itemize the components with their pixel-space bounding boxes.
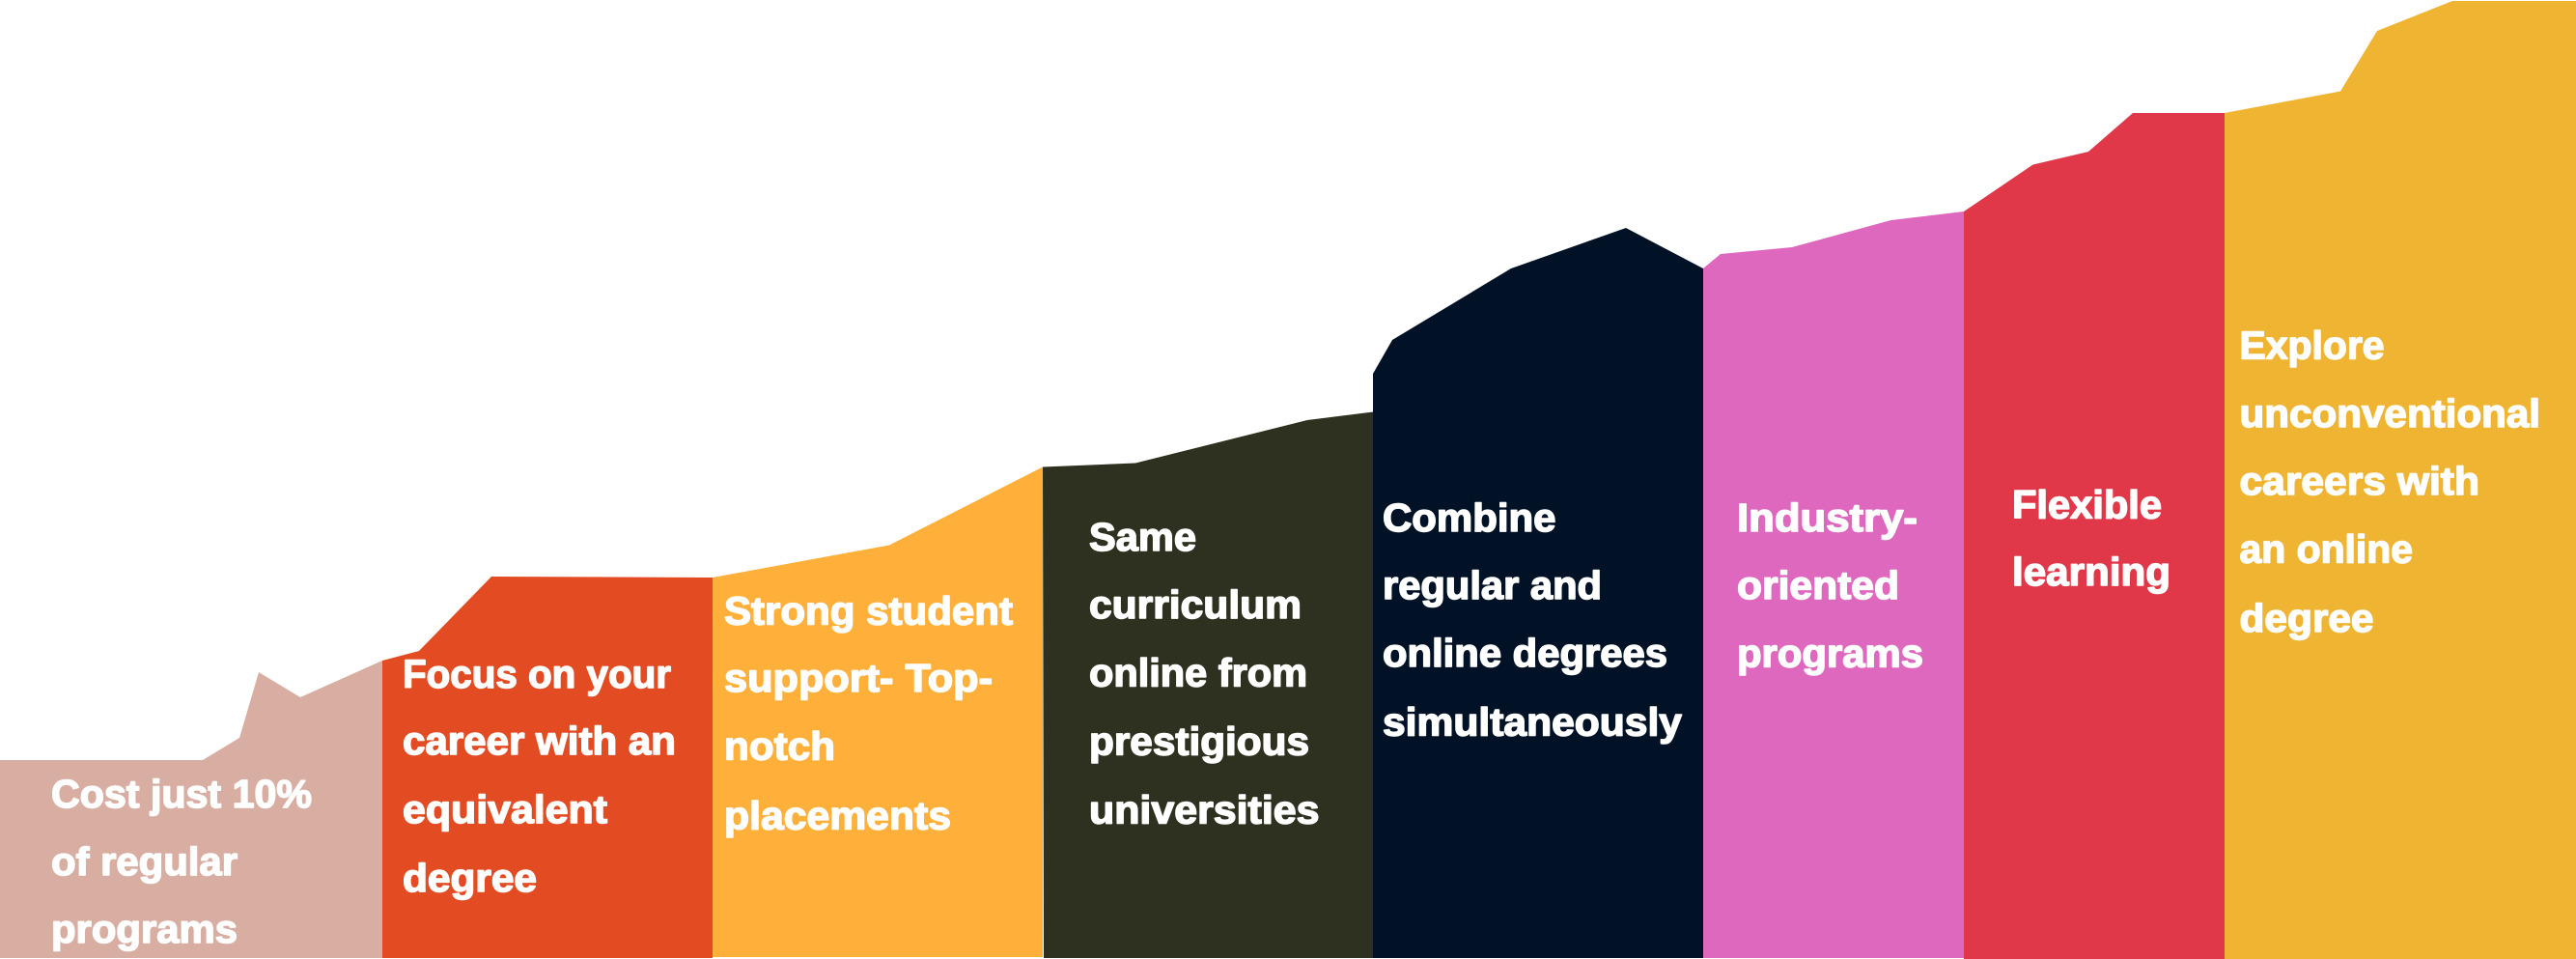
text: focus on your career: Focus on your [403,652,671,696]
text: focus on your career: degree [403,856,537,900]
text: strong student support: notch [724,724,835,769]
text: explore unconventional careers: an online [2240,527,2413,572]
text: same curriculum: curriculum [1089,582,1302,627]
text: cost just 10% [51,772,312,951]
text: flexible learning: Flexible [2012,483,2162,527]
text: explore unconventional careers: careers with [2240,459,2479,503]
text: combine regular and online: regular and [1383,563,1602,607]
text: industry-oriented programs [1737,495,1923,676]
text: same curriculum: online from [1089,651,1307,695]
panel: industry-oriented [1703,212,1964,958]
text: explore unconventional careers: Explore [2240,323,2385,367]
text: combine regular and online: online degrees [1383,631,1667,675]
text: flexible learning [2012,483,2170,594]
text: focus on your career: career with an [403,719,676,763]
text: cost just 10%: programs [51,907,238,951]
panel: focus on career [382,577,713,958]
text: combine regular and online: Combine [1383,495,1556,540]
text: combine regular and online [1383,495,1682,744]
text: explore unconventional careers [2240,323,2540,640]
text: explore unconventional careers: unconventional [2240,391,2540,436]
panel: same curriculum [1043,411,1373,958]
text: strong student support [724,589,1013,838]
text: same curriculum: universities [1089,788,1319,832]
text: strong student support: Strong student [724,589,1013,634]
text: industry-oriented programs: programs [1737,632,1923,676]
text: industry-oriented programs: oriented [1737,563,1899,607]
panel: student support [713,467,1043,957]
text: combine regular and online: simultaneously [1383,699,1682,744]
panel: unconventional careers [2225,1,2576,959]
text: same curriculum: Same [1089,515,1196,559]
text: flexible learning: learning [2012,550,2170,594]
text: focus on your career: equivalent [403,787,607,832]
text: same curriculum [1089,515,1319,832]
panel: flexible learning [1964,113,2225,959]
panel: cost [0,661,382,958]
text: cost just 10%: Cost just 10% [51,772,312,816]
panel: combine degrees [1373,228,1703,958]
text: strong student support: placements [724,794,951,838]
text: explore unconventional careers: degree [2240,596,2373,640]
text: cost just 10%: of regular [51,839,238,884]
text: focus on your career [403,652,676,900]
text: industry-oriented programs: Industry- [1737,495,1918,540]
text: strong student support: support- Top- [724,656,993,700]
text: same curriculum: prestigious [1089,719,1309,763]
